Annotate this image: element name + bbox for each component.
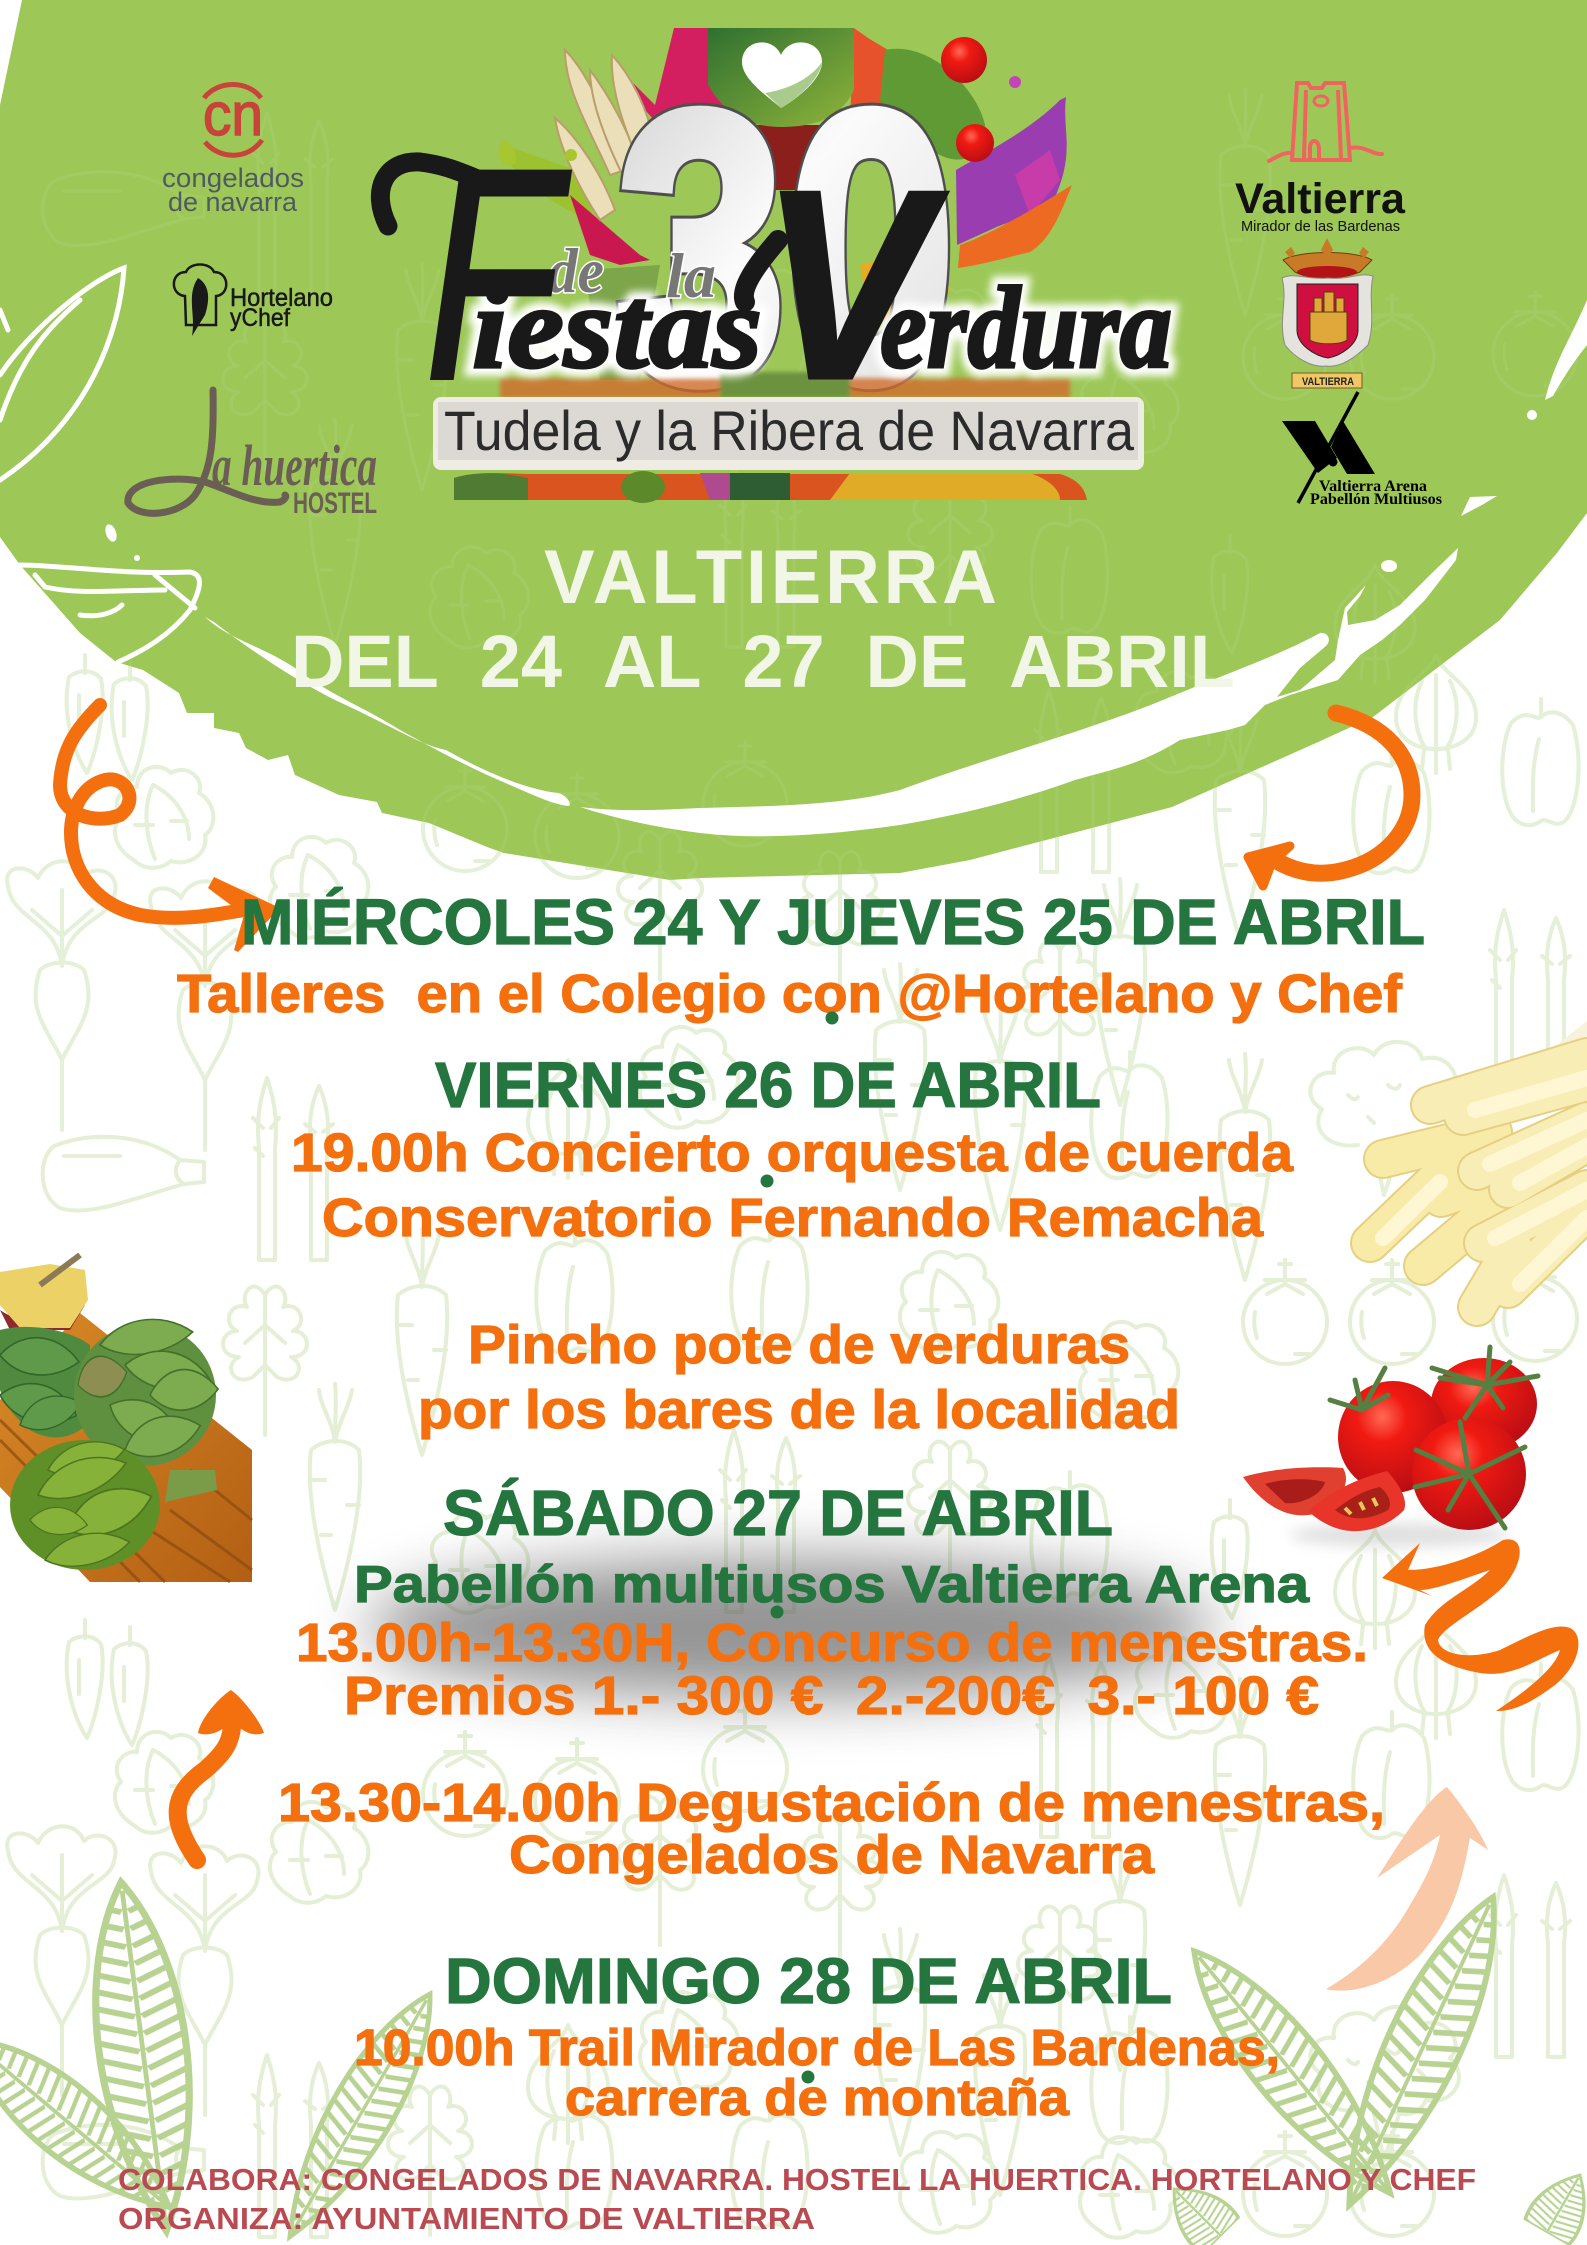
de la: de [548,235,604,306]
schedule: wednesday and thursday: MIÉRCOLES 24 Y JUEVES 25 DE ABRIL [241,886,1425,958]
white brush strokes on green [103,300,1587,836]
schedule: saturday: SÁBADO 27 DE ABRIL [443,1477,1113,1549]
arrow: peach up [1326,1787,1488,1991]
footer credits: ORGANIZA: AYUNTAMIENTO DE VALTIERRA [118,2201,815,2236]
logo: congelados de navarra [162,81,304,217]
schedule: friday: Conservatorio Fernando Remacha [322,1188,1264,1248]
halo behind script: erdura [880,262,1172,393]
schedule: sunday: carrera de montaña [565,2069,1070,2126]
logo: Hortelano y Chef: Hortelano [230,284,333,312]
logo: congelados de navarra: de navarra [168,187,298,217]
emblem: Valtierra coat of arms: VALTIERRA [1302,376,1354,388]
arrow: left up [178,1690,264,1860]
schedule: saturday: Pabellón multiusos Valtierra Arena [354,1556,1310,1614]
schedule: friday: 19.00h Concierto orquesta de cuerda [291,1123,1294,1183]
central festival logo [380,28,1172,503]
schedule: pincho pote: Pincho pote de verduras [468,1315,1130,1375]
logo: Hortelano y Chef [174,264,333,336]
schedule: wednesday and thursday: Talleres en el Colegio con @Hortelano y Chef [177,964,1403,1024]
schedule: friday [291,1049,1294,1248]
script title: erdura [880,262,1172,393]
script title: iestas [472,262,762,393]
logo: Valtierra tower: Mirador de las Bardenas [1241,218,1400,235]
schedule: sunday [354,1945,1280,2126]
anniversary number 30: 30 [616,31,956,462]
arrow: top-right curve [1248,713,1412,886]
logo: La huertica hostel: a huertica [212,433,377,498]
script title [380,106,1172,442]
white leaf outline lower-left of green [20,565,199,662]
photo: white asparagus [1370,1021,1587,1307]
stray green dots [760,1012,838,2084]
white leaf outline top-left [0,268,124,480]
logo: congelados de navarra: congelados [162,163,304,193]
faint vegetable pattern on green [7,89,1579,1230]
schedule: pincho pote: por los bares de la localidad [418,1380,1180,1440]
logo: La huertica hostel [128,390,377,520]
schedule: saturday: 13.00h-13.30H, Concurso de menestras. [296,1613,1368,1673]
logo: Hortelano y Chef: yChef [230,304,290,332]
schedule: wednesday and thursday [177,886,1425,1024]
shadow behind saturday text [365,1558,1215,1698]
footer credits [118,2162,1476,2236]
green brush shape header [0,0,1587,880]
arrow: top-left loop [60,705,280,952]
schedule: pincho pote [418,1315,1180,1440]
banner: Tudela y la Ribera de Navarra: Tudela y la Ribera de Navarra [444,399,1135,462]
arrow: right squiggle [1382,1539,1578,1711]
anniversary number 30: 30 [616,31,956,462]
photo: tomatoes [1243,1347,1538,1547]
schedule: saturday: 13.30-14.00h Degustación de menestras, [278,1773,1385,1833]
decorative leaves bottom [0,1876,1587,2245]
logo: Valtierra Arena [1282,392,1442,508]
photo: artichokes on wooden board [0,1255,252,1582]
schedule: friday: VIERNES 26 DE ABRIL [435,1049,1101,1121]
script title: V [760,135,951,436]
logo: Valtierra tower [1235,83,1406,235]
de la: la [666,240,716,311]
logo: Valtierra tower: Valtierra [1235,175,1406,223]
logo: Valtierra Arena: Pabellón Multiusos [1310,491,1442,508]
schedule: sunday: DOMINGO 28 DE ABRIL [445,1945,1172,2017]
schedule: saturday: Congelados de Navarra [509,1825,1155,1885]
subtitle: dates: DEL 24 AL 27 DE ABRIL [291,620,1235,703]
lower veg strip [454,372,1087,503]
logo: congelados de navarra: cn [203,81,263,148]
title: VALTIERRA: VALTIERRA [544,535,997,620]
schedule: sunday: 10.00h Trail Mirador de Las Bardenas, [354,2019,1280,2076]
halo behind script [472,262,1172,393]
emblem: Valtierra coat of arms [1282,238,1373,388]
footer credits: COLABORA: CONGELADOS DE NAVARRA. HOSTEL LA HUERTICA. HORTELANO Y CHEF [118,2162,1476,2197]
schedule: saturday: Premios 1.- 300 € 2.-200€ 3.- 100 € [344,1666,1319,1726]
halo behind script: iestas [472,262,762,393]
colourful vegetable splashes [499,28,1072,380]
de la [548,235,716,311]
schedule: saturday [278,1477,1385,1885]
vegetable line-art pattern [7,655,1579,2238]
script title: F [425,106,573,442]
logo: Valtierra Arena: Valtierra Arena [1319,478,1427,495]
logo: La huertica hostel: HOSTEL [293,487,377,520]
